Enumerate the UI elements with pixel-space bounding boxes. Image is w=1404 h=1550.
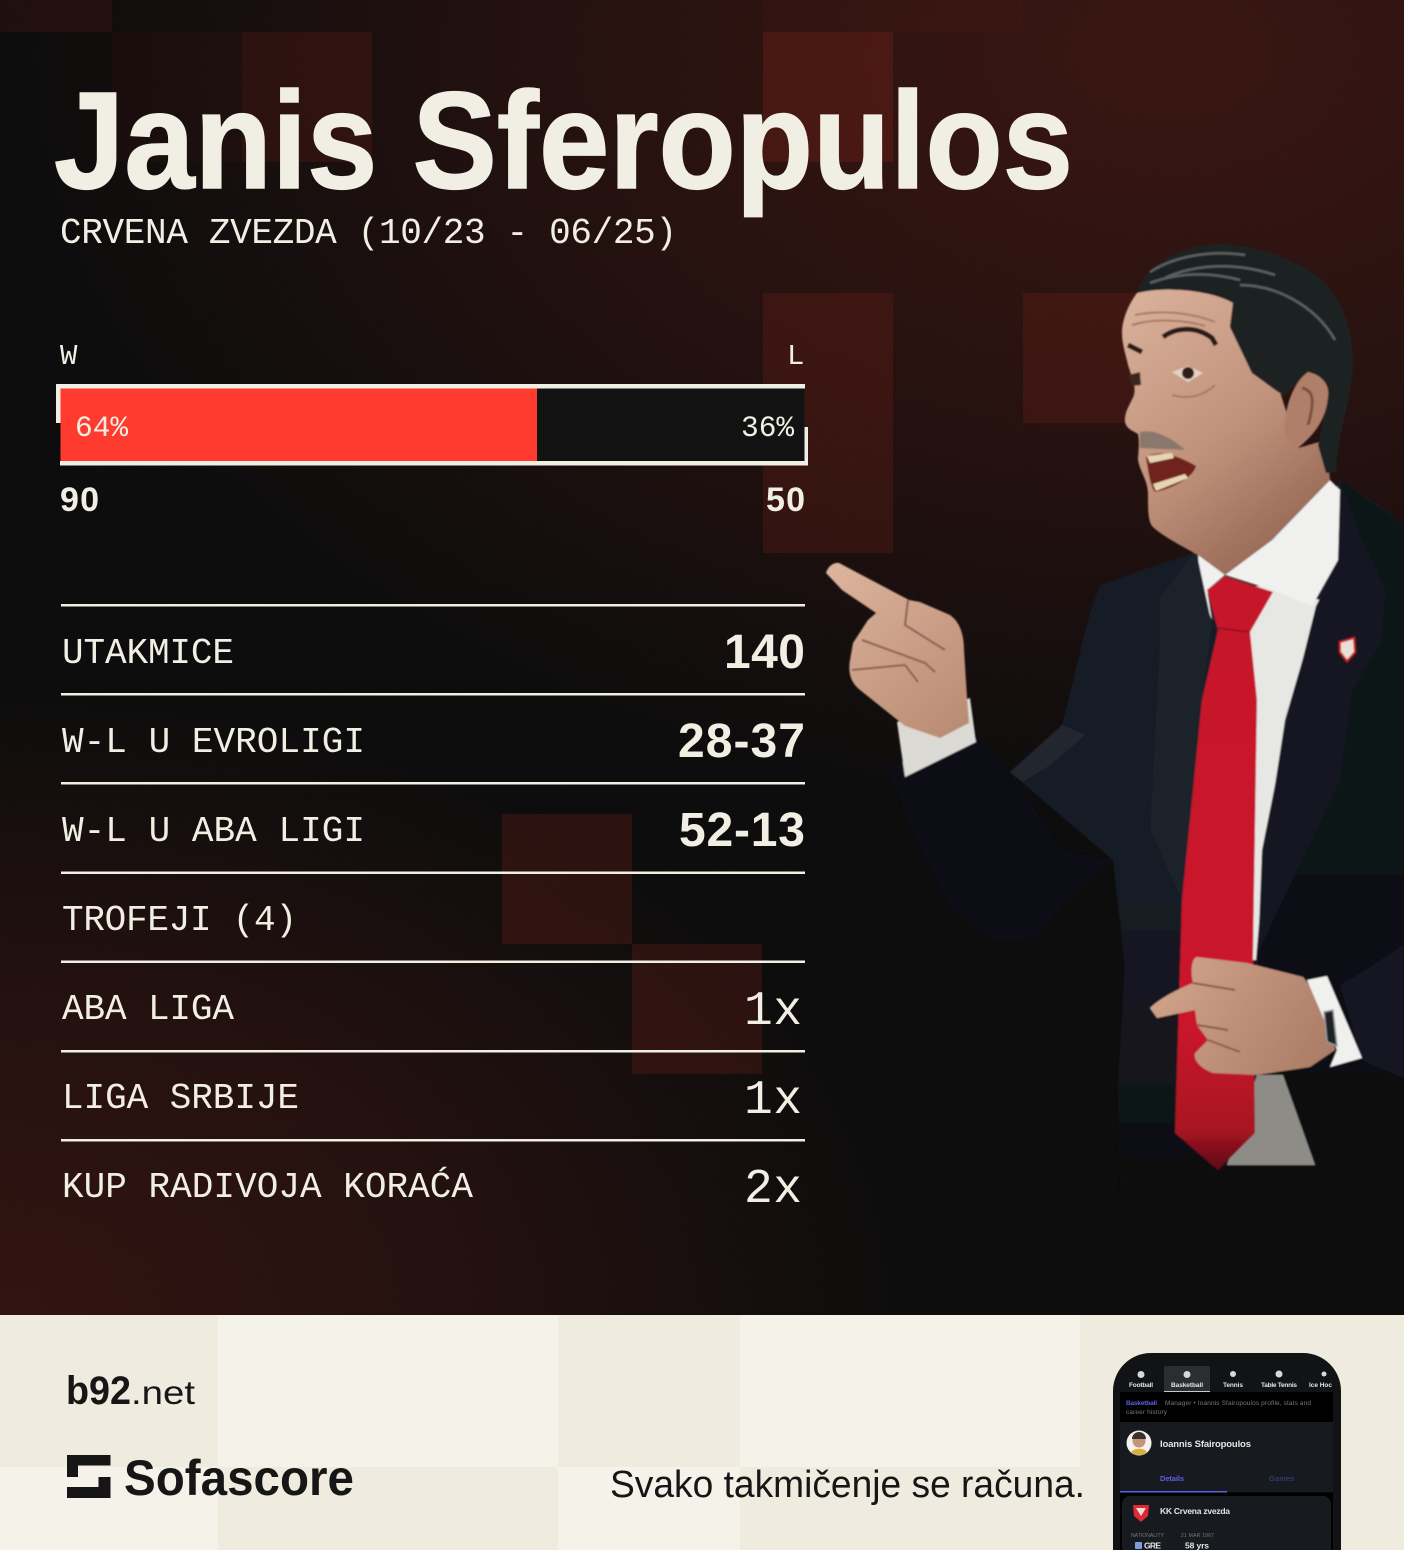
club card	[1120, 1492, 1333, 1550]
value: 36%: 36%	[741, 411, 794, 445]
row: games	[62, 626, 805, 679]
sport tabs: Football	[1129, 1382, 1153, 1389]
row: ABA league trophy: 1x	[744, 985, 802, 1039]
profile panel	[1120, 1422, 1333, 1492]
club card: NATIONALITY	[1131, 1533, 1165, 1539]
row: ABA league record: W-L U ABA LIGI	[62, 811, 365, 852]
right cuff	[1307, 976, 1362, 1067]
subtitle: club and period: CRVENA ZVEZDA (10/23 - 06/25)	[60, 213, 677, 254]
logo: b92.net	[66, 1369, 195, 1413]
row: ABA league record: 52-13	[679, 804, 805, 857]
breadcrumb: Manager • Ioannis Sfairopoulos profile, stats and	[1165, 1400, 1311, 1407]
row: Radivoj Korac cup trophy: 2x	[744, 1163, 802, 1217]
row: Radivoj Korac cup trophy: KUP RADIVOJA KORAĆA	[62, 1165, 473, 1208]
wrinkles	[1132, 312, 1215, 397]
lapels	[1258, 480, 1385, 952]
club crest	[1133, 1505, 1149, 1522]
breadcrumb	[1120, 1392, 1333, 1422]
row: games: UTAKMICE	[62, 633, 234, 674]
row: ABA league trophy: ABA LIGA	[62, 989, 234, 1030]
lower hand	[1150, 957, 1335, 1075]
bar segment: wins 64%	[60, 388, 537, 461]
logo: Sofascore wordmark: Sofascore	[124, 1450, 354, 1506]
wins count: 90	[60, 481, 99, 519]
row: ABA league trophy	[62, 985, 802, 1039]
value: 64%: 64%	[75, 411, 128, 445]
jacket	[1010, 480, 1404, 1190]
collar	[1198, 480, 1340, 620]
lapel pin	[1340, 638, 1355, 661]
win-loss bar chart	[56, 340, 808, 519]
row: ABA league record	[62, 804, 805, 857]
panel: footer	[0, 1315, 1404, 1550]
row: Radivoj Korac cup trophy	[62, 1163, 802, 1217]
bar segment: losses 36%	[537, 388, 804, 461]
row: EuroLeague record: W-L U EVROLIGI	[62, 722, 365, 763]
sport tabs: Basketball	[1171, 1382, 1203, 1389]
neck and face	[1122, 290, 1330, 575]
tie	[1175, 576, 1273, 1170]
row: games: 140	[724, 626, 805, 679]
logo: Sofascore icon	[67, 1455, 110, 1498]
row: EuroLeague record	[62, 715, 805, 768]
breadcrumb: career history	[1126, 1409, 1168, 1416]
left cuff	[897, 698, 976, 777]
sport tabs: Ice Hoc	[1309, 1382, 1332, 1389]
coach portrait illustration	[826, 244, 1404, 1190]
row: trophies heading: TROFEJI (4)	[62, 900, 297, 941]
hair	[1137, 244, 1353, 473]
title: Janis Sferopulos	[54, 64, 1073, 218]
phone mockup	[1113, 1353, 1341, 1550]
profile panel: Ioannis Sfairopoulos	[1160, 1439, 1251, 1450]
club card: 21 MAR 1967	[1181, 1533, 1214, 1539]
watch	[1324, 1010, 1337, 1046]
label: L: L	[787, 340, 804, 373]
pointing hand	[826, 563, 969, 738]
club card: KK Crvena zvezda	[1160, 1506, 1230, 1516]
row: Serbian league trophy	[62, 1074, 802, 1128]
sport tabs	[1129, 1370, 1332, 1389]
logo: b92.net: .net	[131, 1374, 195, 1411]
breadcrumb: Basketball	[1126, 1400, 1157, 1407]
row: Serbian league trophy: 1x	[744, 1074, 802, 1128]
losses count: 50	[766, 481, 805, 519]
tagline: Svako takmičenje se računa.	[610, 1464, 1085, 1506]
row: Serbian league trophy: LIGA SRBIJE	[62, 1078, 299, 1119]
profile panel: Games	[1269, 1474, 1294, 1483]
stats table	[61, 604, 805, 1217]
sport tabs: Tennis	[1223, 1382, 1243, 1389]
eyebrows and eyes	[1128, 329, 1216, 352]
label: W: W	[60, 340, 78, 373]
active tab	[1164, 1366, 1210, 1392]
ear	[1285, 372, 1328, 448]
mouth	[1146, 454, 1196, 492]
shirt	[1205, 585, 1320, 960]
profile panel: Details	[1160, 1474, 1184, 1483]
left sleeve	[887, 738, 1113, 942]
bar frame	[56, 384, 808, 466]
row: EuroLeague record: 28-37	[678, 715, 805, 768]
sport tabs: Table Tennis	[1261, 1382, 1297, 1389]
logo: b92.net: b92	[66, 1369, 131, 1413]
